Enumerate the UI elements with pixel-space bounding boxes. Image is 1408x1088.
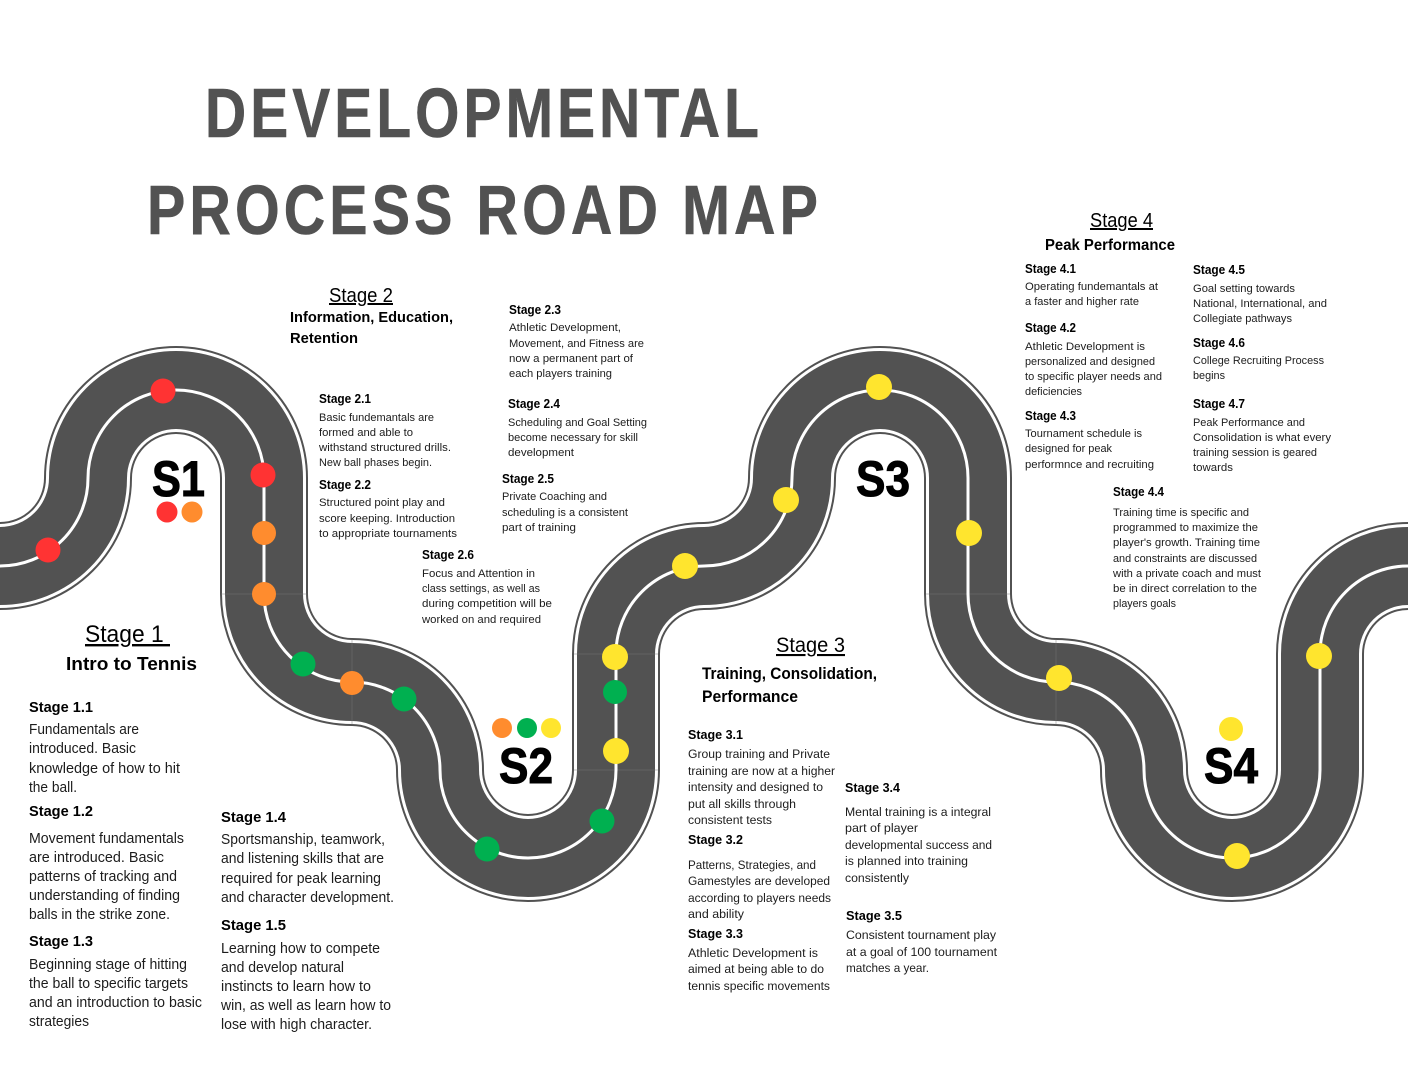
text: stage 4.4: be in direct correlation to the: [1113, 583, 1257, 595]
text: stage 2.1: [318, 392, 451, 469]
text: stage 1.4: required for peak learning: [221, 871, 381, 887]
text: stage 4.1: a faster and higher rate: [1025, 296, 1139, 308]
heading: stage 2: Information, Education,: [290, 309, 453, 326]
text: stage 3.5: [846, 908, 998, 975]
text: stage 1.1: the ball.: [29, 780, 77, 796]
text: stage 3.2: [688, 832, 831, 921]
text: stage 3.5: Stage 3.5: [846, 908, 902, 923]
heading: stage 2: [290, 285, 453, 347]
text: stage 3.1: training are now at a higher: [688, 764, 835, 778]
winding road: [0, 390, 1408, 858]
text: stage 2.5: scheduling is a consistent: [502, 507, 628, 519]
text: stage 2.3: [509, 303, 644, 380]
text: stage 2.4: [508, 397, 647, 459]
text: stage 4.5: [1193, 263, 1327, 325]
text: stage 2.6: [421, 548, 552, 626]
badge: S1: [152, 451, 205, 522]
text: stage 1.3: Beginning stage of hitting: [29, 957, 187, 973]
badge: S2: S2: [499, 738, 553, 794]
text: stage 4.3: performnce and recruiting: [1025, 459, 1154, 471]
text: stage 3.2: Patterns, Strategies, and: [688, 858, 816, 872]
text: stage 4.7: [1193, 397, 1332, 474]
text: stage 2.1: withstand structured drills.: [318, 442, 451, 454]
text: stage 1.3: and an introduction to basic: [29, 995, 202, 1011]
road markers: stage 3 and 4: [602, 374, 1332, 869]
text: stage 4.2: to specific player needs and: [1025, 371, 1162, 383]
text: stage 3.3: Stage 3.3: [688, 926, 743, 941]
text: stage 4.3: designed for peak: [1025, 443, 1112, 455]
text: stage 2.3: now a permanent part of: [509, 353, 634, 365]
text: stage 2.2: Stage 2.2: [319, 478, 371, 492]
text: stage 2.6: worked on and required: [421, 614, 541, 626]
text: stage 2.5: Private Coaching and: [502, 491, 607, 503]
text: stage 3.3: aimed at being able to do: [688, 962, 824, 976]
text: stage 3.4: Mental training is a integral: [845, 805, 991, 819]
text: stage 1.5: lose with high character.: [221, 1017, 372, 1033]
text: stage 1.5: win, as well as learn how to: [220, 998, 391, 1014]
text: stage 3.4: consistently: [845, 871, 910, 885]
text: stage 4.1: Operating fundemantals at: [1025, 281, 1158, 293]
text: stage 2.1: Basic fundemantals are: [319, 412, 434, 424]
text: stage 4.7: Peak Performance and: [1193, 417, 1305, 429]
text: stage 1.2: understanding of finding: [29, 888, 180, 904]
text: stage 4.1: [1025, 262, 1158, 308]
road markers: stage 1 and 2: [36, 378, 627, 862]
text: stage 3.2: according to players needs: [688, 891, 831, 905]
text: stage 3.1: Group training and Private: [688, 747, 830, 761]
text: stage 1.2: Stage 1.2: [29, 803, 93, 820]
text: stage 2.6: class settings, as well as: [422, 583, 540, 595]
text: stage 2.1: New ball phases begin.: [319, 457, 432, 469]
heading: stage 3: Training, Consolidation,: [702, 665, 877, 683]
badge: S4: [1204, 717, 1258, 794]
text: stage 4.6: Stage 4.6: [1193, 336, 1245, 350]
text: stage 4.6: [1193, 336, 1324, 382]
panel: stage 2: [290, 285, 647, 626]
text: stage 2.3: each players training: [509, 368, 612, 380]
text: stage 1.2: Movement fundamentals: [29, 831, 184, 847]
text: stage 4.2: Stage 4.2: [1025, 321, 1076, 335]
badge: S2: [492, 718, 561, 794]
text: stage 4.2: deficiencies: [1025, 386, 1082, 398]
text: stage 2.2: [319, 478, 458, 540]
text: stage 4.3: [1025, 409, 1154, 471]
heading: stage 2: Retention: [290, 330, 358, 347]
text: stage 3.4: is planned into training: [845, 854, 968, 868]
text: stage 2.1: formed and able to: [319, 427, 413, 439]
text: stage 2.5: part of training: [502, 522, 576, 534]
text: stage 3.3: Athletic Development is: [688, 946, 818, 960]
text: stage 1.2: [29, 803, 184, 923]
text: stage 1.3: [29, 933, 202, 1030]
text: stage 4.4: programmed to maximize the: [1113, 522, 1258, 534]
text: stage 1.5: [220, 917, 391, 1033]
text: stage 3.2: Stage 3.2: [688, 832, 743, 847]
badge: S4: S4: [1204, 738, 1258, 794]
title: DEVELOPMENTAL: [205, 74, 763, 152]
text: stage 2.4: development: [508, 447, 574, 459]
text: stage 1.5: instincts to learn how to: [221, 979, 371, 995]
panel: stage 3: [688, 634, 998, 993]
text: stage 1.1: [29, 699, 180, 796]
text: stage 2.3: Athletic Development,: [509, 322, 621, 334]
heading: stage 2: Stage 2: [329, 285, 393, 307]
text: stage 4.5: Goal setting towards: [1193, 283, 1296, 295]
text: stage 4.5: Stage 4.5: [1193, 263, 1245, 277]
text: stage 3.3: tennis specific movements: [688, 979, 830, 993]
heading: stage 3: [702, 634, 877, 706]
text: stage 4.3: Stage 4.3: [1025, 409, 1076, 423]
text: stage 3.3: [688, 926, 830, 993]
text: stage 2.5: [502, 472, 628, 534]
title: PROCESS ROAD MAP: [147, 171, 822, 249]
text: stage 2.3: Movement, and Fitness are: [509, 338, 644, 350]
heading: stage 1: [66, 621, 197, 674]
text: stage 3.4: developmental success and: [845, 838, 992, 852]
text: stage 2.6: Focus and Attention in: [422, 568, 535, 580]
panel: stage 1: [29, 621, 394, 1033]
text: stage 2.4: Stage 2.4: [508, 397, 560, 411]
heading: stage 4: Stage 4: [1090, 210, 1153, 232]
text: stage 1.3: the ball to specific targets: [29, 976, 188, 992]
panel: stage 4: [1025, 210, 1332, 610]
text: stage 4.5: National, International, and: [1193, 298, 1327, 310]
title: [147, 74, 822, 249]
heading: stage 4: Peak Performance: [1045, 237, 1175, 254]
text: stage 4.4: Training time is specific and: [1113, 507, 1249, 519]
text: stage 2.1: Stage 2.1: [319, 392, 371, 406]
text: stage 4.7: Consolidation is what every: [1193, 432, 1332, 444]
text: stage 4.4: [1112, 485, 1261, 610]
text: stage 2.4: become necessary for skill: [508, 432, 638, 444]
text: stage 2.2: score keeping. Introduction: [319, 513, 455, 525]
heading: stage 4: [1045, 210, 1175, 254]
text: stage 2.6: Stage 2.6: [422, 548, 474, 562]
text: stage 3.5: matches a year.: [846, 961, 929, 975]
text: stage 1.3: Stage 1.3: [29, 933, 93, 950]
text: stage 1.3: strategies: [29, 1014, 89, 1030]
heading: stage 3: Performance: [702, 688, 798, 706]
text: stage 2.2: to appropriate tournaments: [319, 528, 458, 540]
text: stage 4.7: Stage 4.7: [1193, 397, 1245, 411]
text: stage 1.2: balls in the strike zone.: [29, 907, 170, 923]
text: stage 1.5: and develop natural: [221, 960, 344, 976]
text: stage 3.1: [688, 727, 835, 827]
heading: stage 1: Stage 1: [85, 621, 170, 648]
text: stage 4.2: Athletic Development is: [1025, 341, 1146, 353]
badge: S1: S1: [152, 451, 205, 507]
text: stage 4.4: and constraints are discussed: [1113, 553, 1257, 565]
text: stage 3.1: intensity and designed to: [688, 780, 823, 794]
text: stage 4.6: College Recruiting Process: [1193, 355, 1324, 367]
text: stage 1.1: knowledge of how to hit: [29, 761, 180, 777]
text: stage 4.7: towards: [1193, 462, 1234, 474]
text: stage 1.4: Sportsmanship, teamwork,: [221, 832, 385, 848]
text: stage 4.4: player's growth. Training time: [1113, 537, 1260, 549]
text: stage 1.4: [221, 809, 394, 906]
heading: stage 1: Intro to Tennis: [66, 653, 197, 674]
text: stage 1.2: patterns of tracking and: [29, 869, 177, 885]
text: stage 2.2: Structured point play and: [319, 497, 445, 509]
text: stage 3.2: Gamestyles are developed: [688, 874, 830, 888]
text: stage 1.1: introduced. Basic: [29, 741, 136, 757]
badge: S3: S3: [856, 451, 910, 507]
text: stage 3.4: part of player: [845, 821, 918, 835]
text: stage 4.7: training session is geared: [1193, 447, 1317, 459]
text: stage 4.2: [1025, 321, 1162, 398]
text: stage 2.5: Stage 2.5: [502, 472, 554, 486]
text: stage 4.4: players goals: [1113, 598, 1176, 610]
text: stage 2.3: Stage 2.3: [509, 303, 561, 317]
text: stage 1.4: Stage 1.4: [221, 809, 287, 826]
text: stage 3.5: at a goal of 100 tournament: [846, 945, 998, 959]
text: stage 3.4: [845, 780, 992, 885]
text: stage 1.1: Stage 1.1: [29, 699, 93, 716]
text: stage 2.4: Scheduling and Goal Setting: [508, 417, 647, 429]
text: stage 3.2: and ability: [688, 907, 745, 921]
text: stage 4.1: Stage 4.1: [1025, 262, 1076, 276]
text: stage 4.6: begins: [1193, 370, 1225, 382]
text: stage 4.2: personalized and designed: [1025, 356, 1155, 368]
text: stage 3.1: consistent tests: [688, 813, 772, 827]
text: stage 4.3: Tournament schedule is: [1025, 428, 1142, 440]
text: stage 1.5: Stage 1.5: [221, 917, 286, 934]
text: stage 3.1: put all skills through: [688, 797, 796, 811]
text: stage 1.2: are introduced. Basic: [29, 850, 164, 866]
text: stage 3.1: Stage 3.1: [688, 727, 743, 742]
heading: stage 3: Stage 3: [776, 634, 845, 657]
text: stage 3.4: Stage 3.4: [845, 780, 901, 795]
text: stage 4.4: Stage 4.4: [1113, 485, 1164, 499]
text: stage 2.6: during competition will be: [422, 598, 552, 610]
text: stage 1.4: and character development.: [221, 890, 394, 906]
text: stage 4.4: with a private coach and must: [1112, 568, 1261, 580]
text: stage 1.1: Fundamentals are: [29, 722, 139, 738]
text: stage 4.5: Collegiate pathways: [1193, 313, 1292, 325]
text: stage 1.5: Learning how to compete: [221, 941, 380, 957]
text: stage 1.4: and listening skills that are: [221, 851, 384, 867]
text: stage 3.5: Consistent tournament play: [846, 928, 997, 942]
